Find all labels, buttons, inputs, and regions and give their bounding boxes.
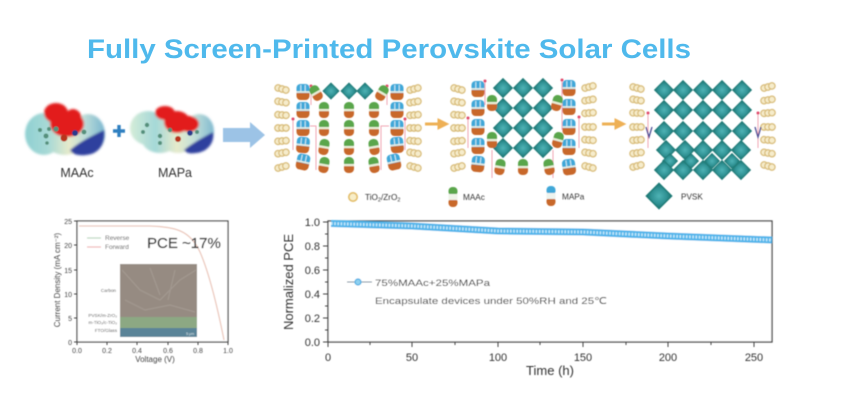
schematic: final perovskite stage [629,81,776,179]
chart: J-V curve: Forward [105,244,129,251]
label: MAPa: MAPa [158,166,192,180]
encapsulation note: Encapsulate devices under 50%RH and 25℃ [375,296,607,307]
chart: stability: 0.0 [305,337,320,349]
legend: TiO2/ZrO2: TiO [365,193,378,202]
legend: TiO2/ZrO2: /ZrO [381,193,397,202]
legend: TiO2/ZrO2 [349,193,400,204]
schematic: intermediate stage [450,78,597,178]
legend: MAAc [448,187,485,207]
chart: J-V curve: 20 [64,243,72,250]
chart: J-V curve: FTO/Glass [95,328,118,333]
legend: MAAc: MAAc [463,193,485,202]
PCE label: PCE ~17% [147,235,221,252]
chart: J-V curve: 0.8 [193,348,203,355]
chart: stability: 0.8 [305,241,320,253]
chart: J-V curve: m-TiO₂/c-TiO₂ [89,320,117,325]
label: MAAc: MAAc [60,166,94,180]
chart: stability: 100 [489,352,507,364]
chart: stability: 200 [659,352,677,364]
chart: J-V curve: 0.2 [102,348,112,355]
legend: MAPa [546,186,585,206]
chart: stability [281,217,772,378]
legend: TiO2/ZrO2: 2 [397,198,400,204]
chart: stability: 150 [574,352,592,364]
legend: PVSK [646,183,703,209]
chart: J-V curve: Voltage (V) [135,355,175,364]
molecule: MAPa [130,106,214,153]
chart: J-V curve: Carbon [101,288,116,293]
SEM inset [120,264,197,337]
chart: J-V curve: 15 [64,268,72,275]
legend: PVSK: PVSK [681,192,703,202]
title: Fully Screen-Printed Perovskite Solar Cells [87,34,691,64]
chart: J-V curve: Reverse [105,235,130,242]
legend: MAPa: MAPa [562,192,585,202]
series legend [347,278,491,289]
chart: J-V curve: 1.0 [223,348,233,355]
chart: J-V curve [53,219,233,364]
arrow: orange 2 [602,120,623,128]
chart: stability: 0.2 [305,313,320,325]
series legend: 75%MAAc+25%MAPa [375,278,491,289]
chart: J-V curve: 0.4 [132,348,142,355]
molecule: MAAc [25,103,105,155]
chart: stability: 0 [325,352,331,364]
chart: J-V curve: PVSK/m-ZrO₂ [88,313,117,318]
chart: stability: 250 [745,352,763,364]
chart: stability: Normalized PCE [281,234,296,330]
chart: J-V curve: 10 [64,292,72,299]
arrow: orange 1 [425,120,446,128]
schematic: initial stage [274,83,422,174]
chart: stability: Time (h) [526,363,574,378]
chart: J-V curve: 5 [68,316,72,323]
chart: J-V curve: 25 [64,219,72,226]
chart: stability: 0.6 [305,265,320,277]
chart: J-V curve: 0.6 [163,348,173,355]
SEM inset: 5 μm [186,332,194,336]
chart: stability: 50 [406,352,418,364]
chart: J-V curve: 0.0 [72,348,82,355]
chart: stability: 1.0 [305,217,320,229]
data series [331,224,772,240]
chart: J-V curve: 0 [68,340,72,347]
arrow: blue [223,122,265,148]
plus sign [113,125,125,137]
legend: TiO2/ZrO2: 2 [378,198,381,204]
chart: J-V curve: Current Density (mA cm⁻²) [53,232,62,327]
chart: stability: 0.4 [305,289,320,301]
